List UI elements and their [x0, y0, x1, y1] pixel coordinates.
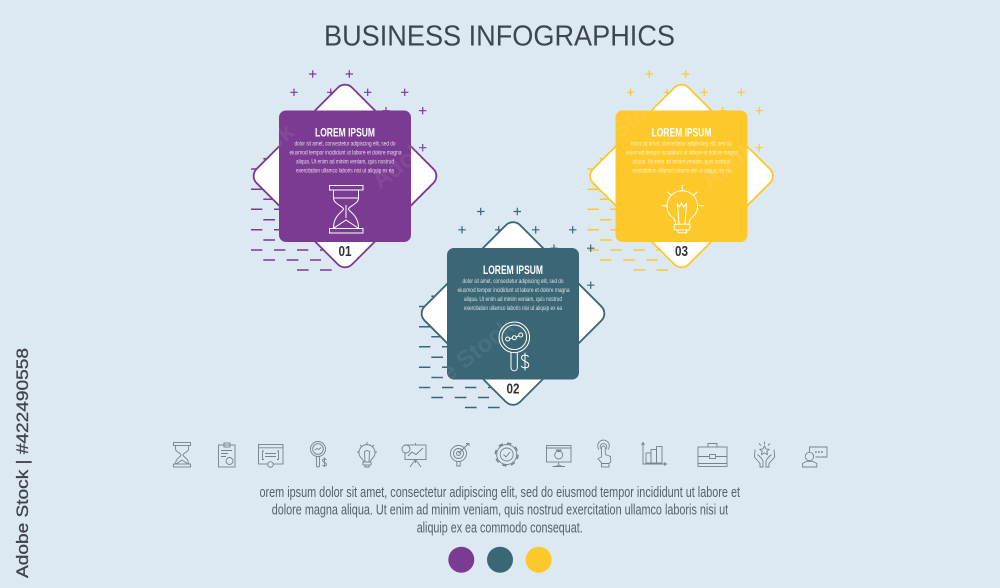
- body text 03: aliqua. Ut enim ad minim veniam, quis nostrud: [632, 158, 731, 166]
- watermark text: Adobe Stock: [212, 273, 345, 385]
- icon: browser window: [258, 444, 283, 467]
- watermark text: Adobe Stock: [37, 238, 170, 350]
- icon: target: [450, 444, 469, 466]
- diamond 02: [418, 218, 608, 409]
- watermark text: Adobe Stock: [27, 393, 160, 505]
- watermark text: Adobe Stock: [842, 463, 975, 575]
- footer paragraph: aliquip ex ea commodo consequat.: [417, 520, 583, 536]
- body text 01: exercitation ullamco laboris nisi ut aliquip ex ea: [296, 168, 394, 175]
- body text 02: [458, 278, 570, 312]
- body text 03: exercitation ullamco laboris nisi ut aliquip ex ea: [632, 168, 731, 175]
- watermark text: Adobe Stock: [697, 83, 830, 195]
- plus decorations 03: [627, 70, 763, 151]
- footer paragraph: dolore magna aliqua. Ut enim ad minim veniam, quis nostrud exercitation ullamco laboris nisi ut: [272, 502, 729, 518]
- body text 02: dolor sit amet, consectetur adipiscing elit, sed do: [462, 278, 564, 285]
- watermark text: Adobe Stock: [667, 273, 800, 385]
- panel 03: yellow card: [586, 70, 777, 271]
- icon: monitor: [546, 446, 571, 466]
- icon: hands with star: [754, 442, 775, 467]
- watermark text: Adobe Stock: [37, 73, 170, 185]
- body text 01: eiusmod tempor incididunt ut labore et dolore magna: [290, 150, 402, 157]
- body text 03: eiusmod tempor incididunt ut labore et dolore magna: [626, 150, 738, 157]
- card 02: [447, 248, 579, 380]
- dash decorations 02: [419, 296, 500, 408]
- plus decorations 01: [290, 70, 426, 151]
- number 01: 01: [338, 243, 352, 260]
- icon: gear: [495, 443, 518, 466]
- watermark text: Adobe Stock: [177, 448, 310, 560]
- watermark text: Adobe Stock: [832, 133, 965, 245]
- legend dots: [448, 547, 552, 573]
- heading 02: LOREM IPSUM: [483, 265, 543, 277]
- side stock label: Adobe Stock | #422490558: [13, 348, 32, 578]
- body text 02: eiusmod tempor incididunt ut labore et dolore magna: [458, 287, 570, 294]
- footer paragraph: orem ipsum dolor sit amet, consectetur adipiscing elit, sed do eiusmod tempor incididunt ut labore et: [260, 484, 741, 501]
- dash decorations 03: [588, 159, 668, 270]
- body text 03: dolor sit amet, consectetur adipiscing elit, sed do: [631, 141, 732, 148]
- heading 01: LOREM IPSUM: [315, 128, 375, 140]
- icon: light bulb: [661, 185, 704, 233]
- card 01: [279, 110, 411, 242]
- body text 02: aliqua. Ut enim ad minim veniam, quis nostrud: [464, 296, 562, 303]
- icon: person with chat: [802, 447, 827, 467]
- watermark text: Adobe Stock: [717, 423, 850, 535]
- body text 01: [290, 141, 402, 175]
- plus decorations 02: [458, 208, 594, 289]
- watermark text: Adobe Stock: [367, 83, 500, 195]
- watermark text: Adobe Stock: [542, 83, 675, 195]
- icon: clipboard: [218, 443, 235, 467]
- title: BUSINESS INFOGRAPHICS: [324, 20, 675, 52]
- icon: magnifier with dollar: [499, 322, 530, 371]
- footer paragraph: [260, 484, 741, 536]
- icon: magnifier small: [310, 442, 326, 467]
- number 02: 02: [506, 380, 520, 397]
- card 03: [616, 110, 748, 242]
- panel 02: teal card: [418, 208, 608, 409]
- watermark text: Adobe Stock: [387, 313, 520, 425]
- watermark text: Adobe Stock: [547, 383, 680, 495]
- icon: bulb small: [357, 442, 377, 467]
- body text 01: aliqua. Ut enim ad minim veniam, quis nostrud: [296, 158, 394, 166]
- body text 01: dolor sit amet, consectetur adipiscing elit, sed do: [294, 141, 396, 148]
- dash decorations 01: [251, 159, 332, 270]
- body text 03: [626, 141, 738, 175]
- heading 03: LOREM IPSUM: [652, 128, 712, 140]
- icon: pointing hand: [598, 440, 611, 467]
- diamond 01: [250, 81, 440, 271]
- number 03: 03: [675, 243, 688, 260]
- watermark text: Adobe Stock: [167, 118, 300, 230]
- icon row: [174, 440, 827, 467]
- icon: hourglass: [330, 186, 363, 233]
- icon: briefcase: [698, 444, 727, 466]
- body text 02: exercitation ullamco laboris nisi ut aliquip ex ea: [464, 305, 562, 312]
- icon: presentation board: [402, 443, 426, 467]
- panel 01: purple card: [250, 70, 440, 271]
- icon: bar chart: [642, 442, 666, 466]
- icon: hourglass small: [174, 442, 190, 467]
- diamond 03: [586, 81, 777, 271]
